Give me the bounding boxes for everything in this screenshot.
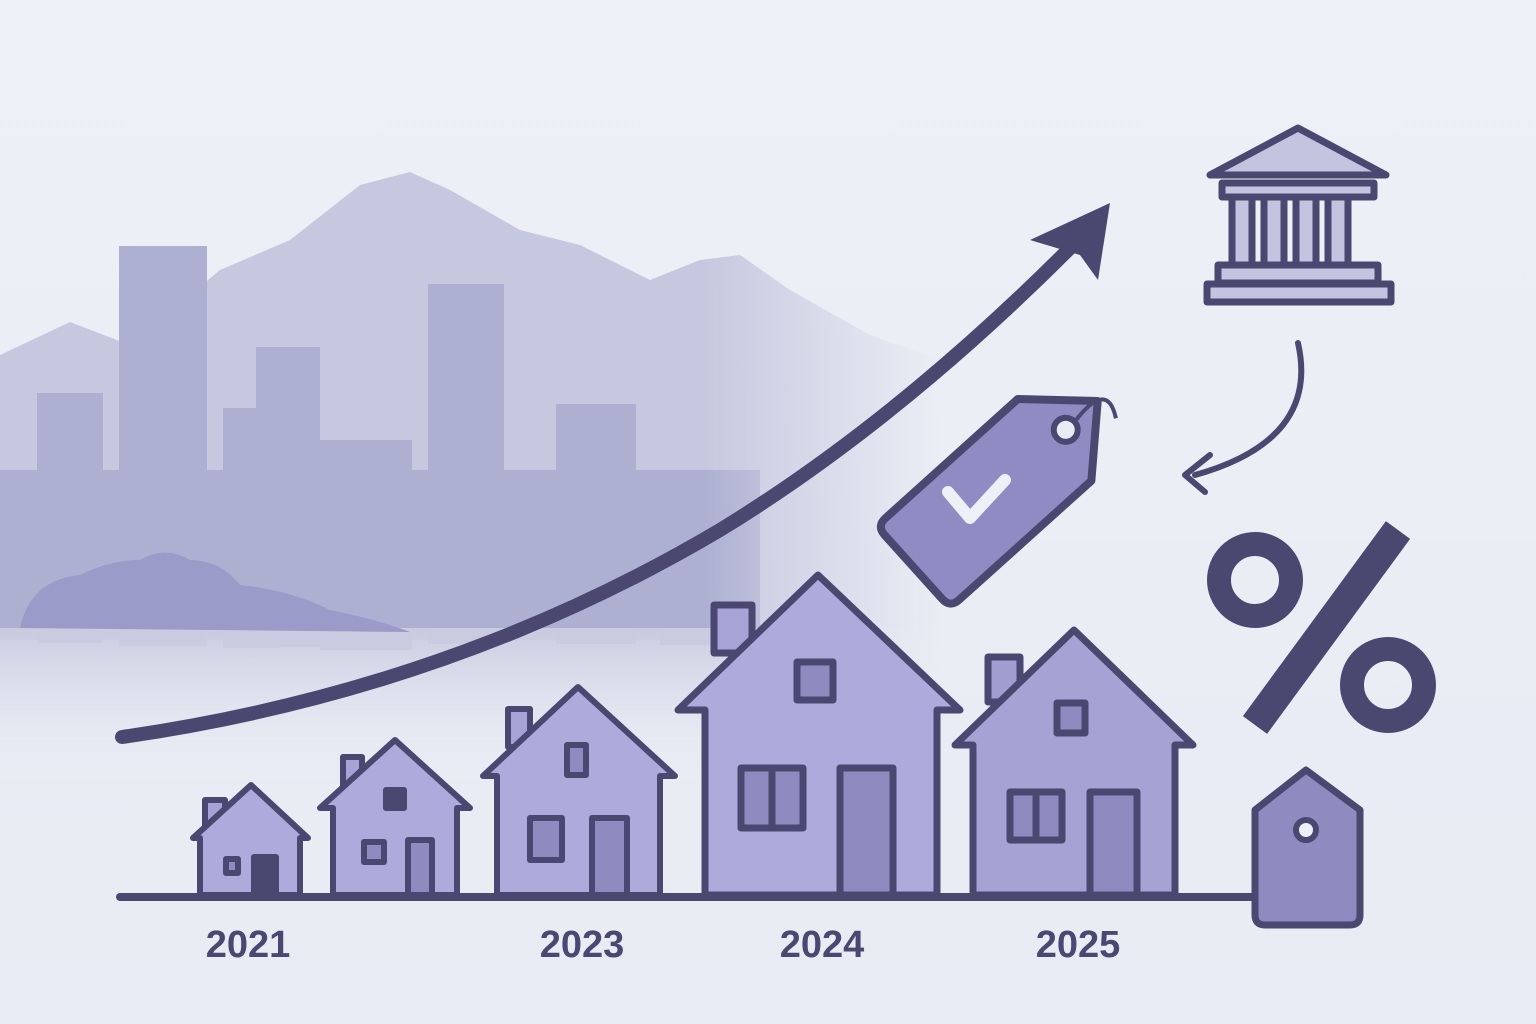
house 2024 [678,575,960,895]
curved arrow: bank to rates [1185,343,1301,492]
year labels: 2023 [540,924,624,966]
icon: price tag with check [877,355,1140,608]
house 2021 [193,785,308,895]
icon: small price tag [1255,770,1360,925]
icon: percent sign [1219,530,1424,725]
year labels: 2024 [780,924,864,966]
house 2022 [320,740,470,895]
ground line [120,893,1256,901]
background: mountains and city skyline [0,172,894,712]
year labels [206,924,1120,966]
rising trend arrow [122,203,1110,737]
house 2025 [955,630,1193,895]
icon: bank [1207,128,1391,302]
year labels: 2021 [206,924,290,966]
house 2023 [483,687,675,895]
year labels: 2025 [1036,924,1120,966]
